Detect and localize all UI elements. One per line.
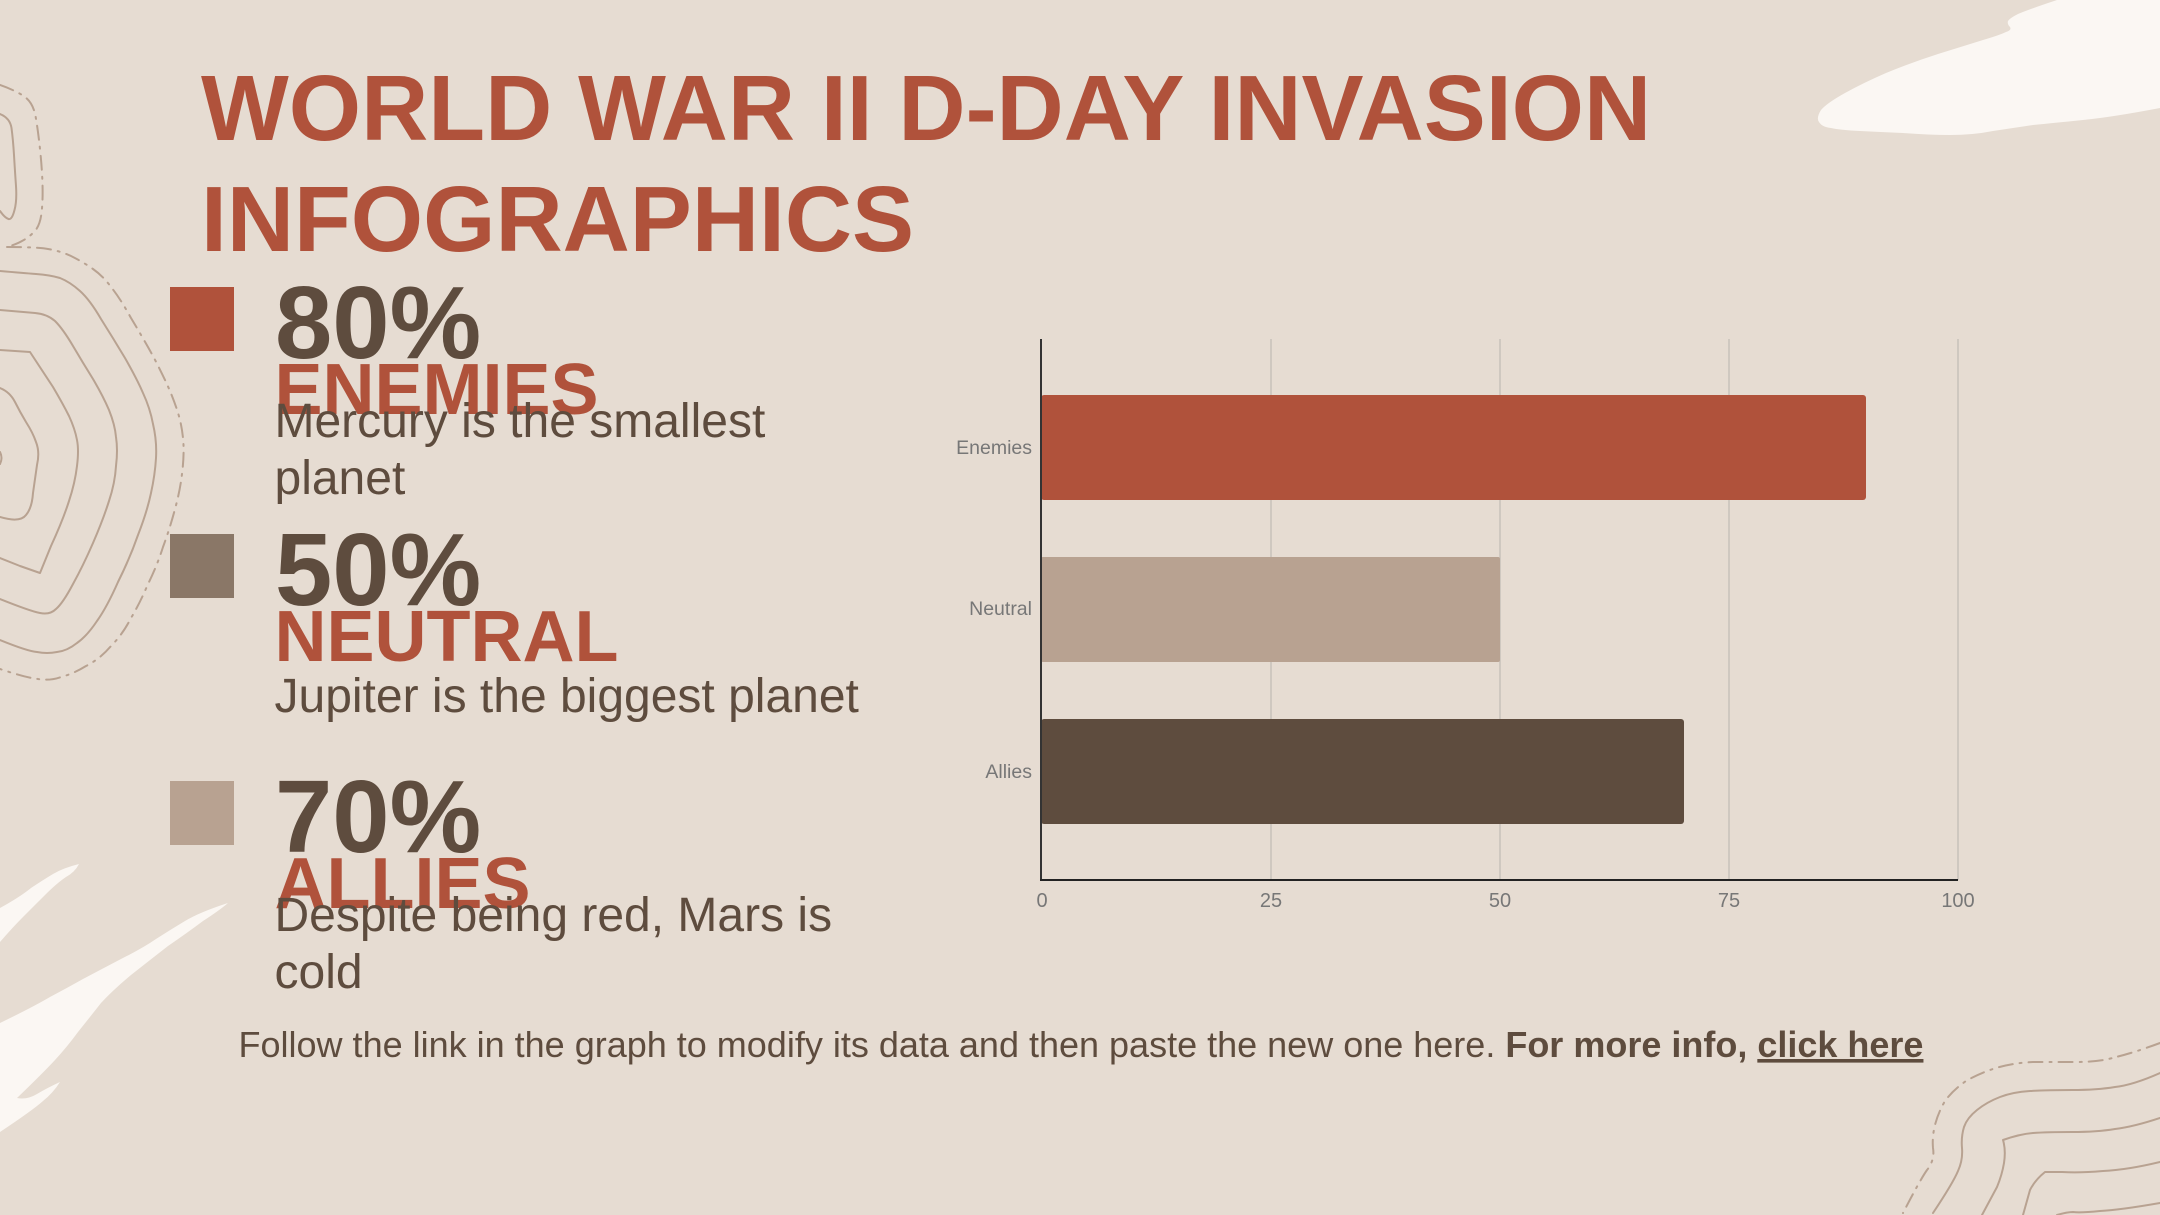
- panel: allies stat: [170, 759, 832, 999]
- panel: neutral stat: [170, 512, 859, 723]
- bar: neutral: [1041, 557, 1500, 662]
- bar: allies: [1041, 719, 1684, 824]
- decoration: white brush top right: [1818, 0, 2160, 135]
- decoration: contour lines bottom right: [1903, 1043, 2160, 1215]
- title: [201, 56, 1651, 271]
- title: INFOGRAPHICS: [201, 167, 914, 271]
- value axis labels: 25: [1260, 890, 1282, 912]
- percentage: 70%: 70%: [275, 759, 481, 874]
- percentage: 50%: 50%: [275, 512, 481, 627]
- legend square: neutral: [170, 534, 234, 598]
- decoration: white brush bottom left: [0, 864, 228, 1132]
- description: enemies: Mercury is the smallest: [274, 395, 765, 448]
- label: enemies: ENEMIES: [274, 350, 599, 430]
- legend square: enemies: [170, 287, 234, 351]
- category labels: Allies: [985, 761, 1032, 783]
- label: allies: ALLIES: [274, 844, 531, 924]
- value axis labels: 50: [1489, 890, 1511, 912]
- bar: enemies: [1041, 395, 1866, 500]
- category labels: Enemies: [956, 437, 1032, 459]
- panel: enemies stat: [170, 265, 765, 505]
- percentage: 80%: 80%: [275, 265, 481, 380]
- decoration: contour lines left: [0, 85, 184, 680]
- footer note: Follow the link in the graph to modify its data and then paste the new one here. For more info, click here: [239, 1024, 1923, 1065]
- description: neutral: Jupiter is the biggest planet: [274, 670, 859, 723]
- category labels: Neutral: [969, 598, 1032, 620]
- category labels: [956, 437, 1032, 783]
- title: WORLD WAR II D-DAY INVASION: [201, 56, 1651, 160]
- value axis labels: [1036, 890, 1975, 912]
- value axis labels: 100: [1941, 890, 1975, 912]
- value axis labels: 0: [1036, 890, 1048, 912]
- description: allies: Despite being red, Mars is: [274, 889, 832, 942]
- label: neutral: NEUTRAL: [274, 597, 618, 677]
- value axis labels: 75: [1718, 890, 1740, 912]
- legend square: allies: [170, 781, 234, 845]
- description: enemies: planet: [274, 452, 405, 505]
- bar chart: [956, 339, 1975, 912]
- description: allies: cold: [274, 946, 363, 999]
